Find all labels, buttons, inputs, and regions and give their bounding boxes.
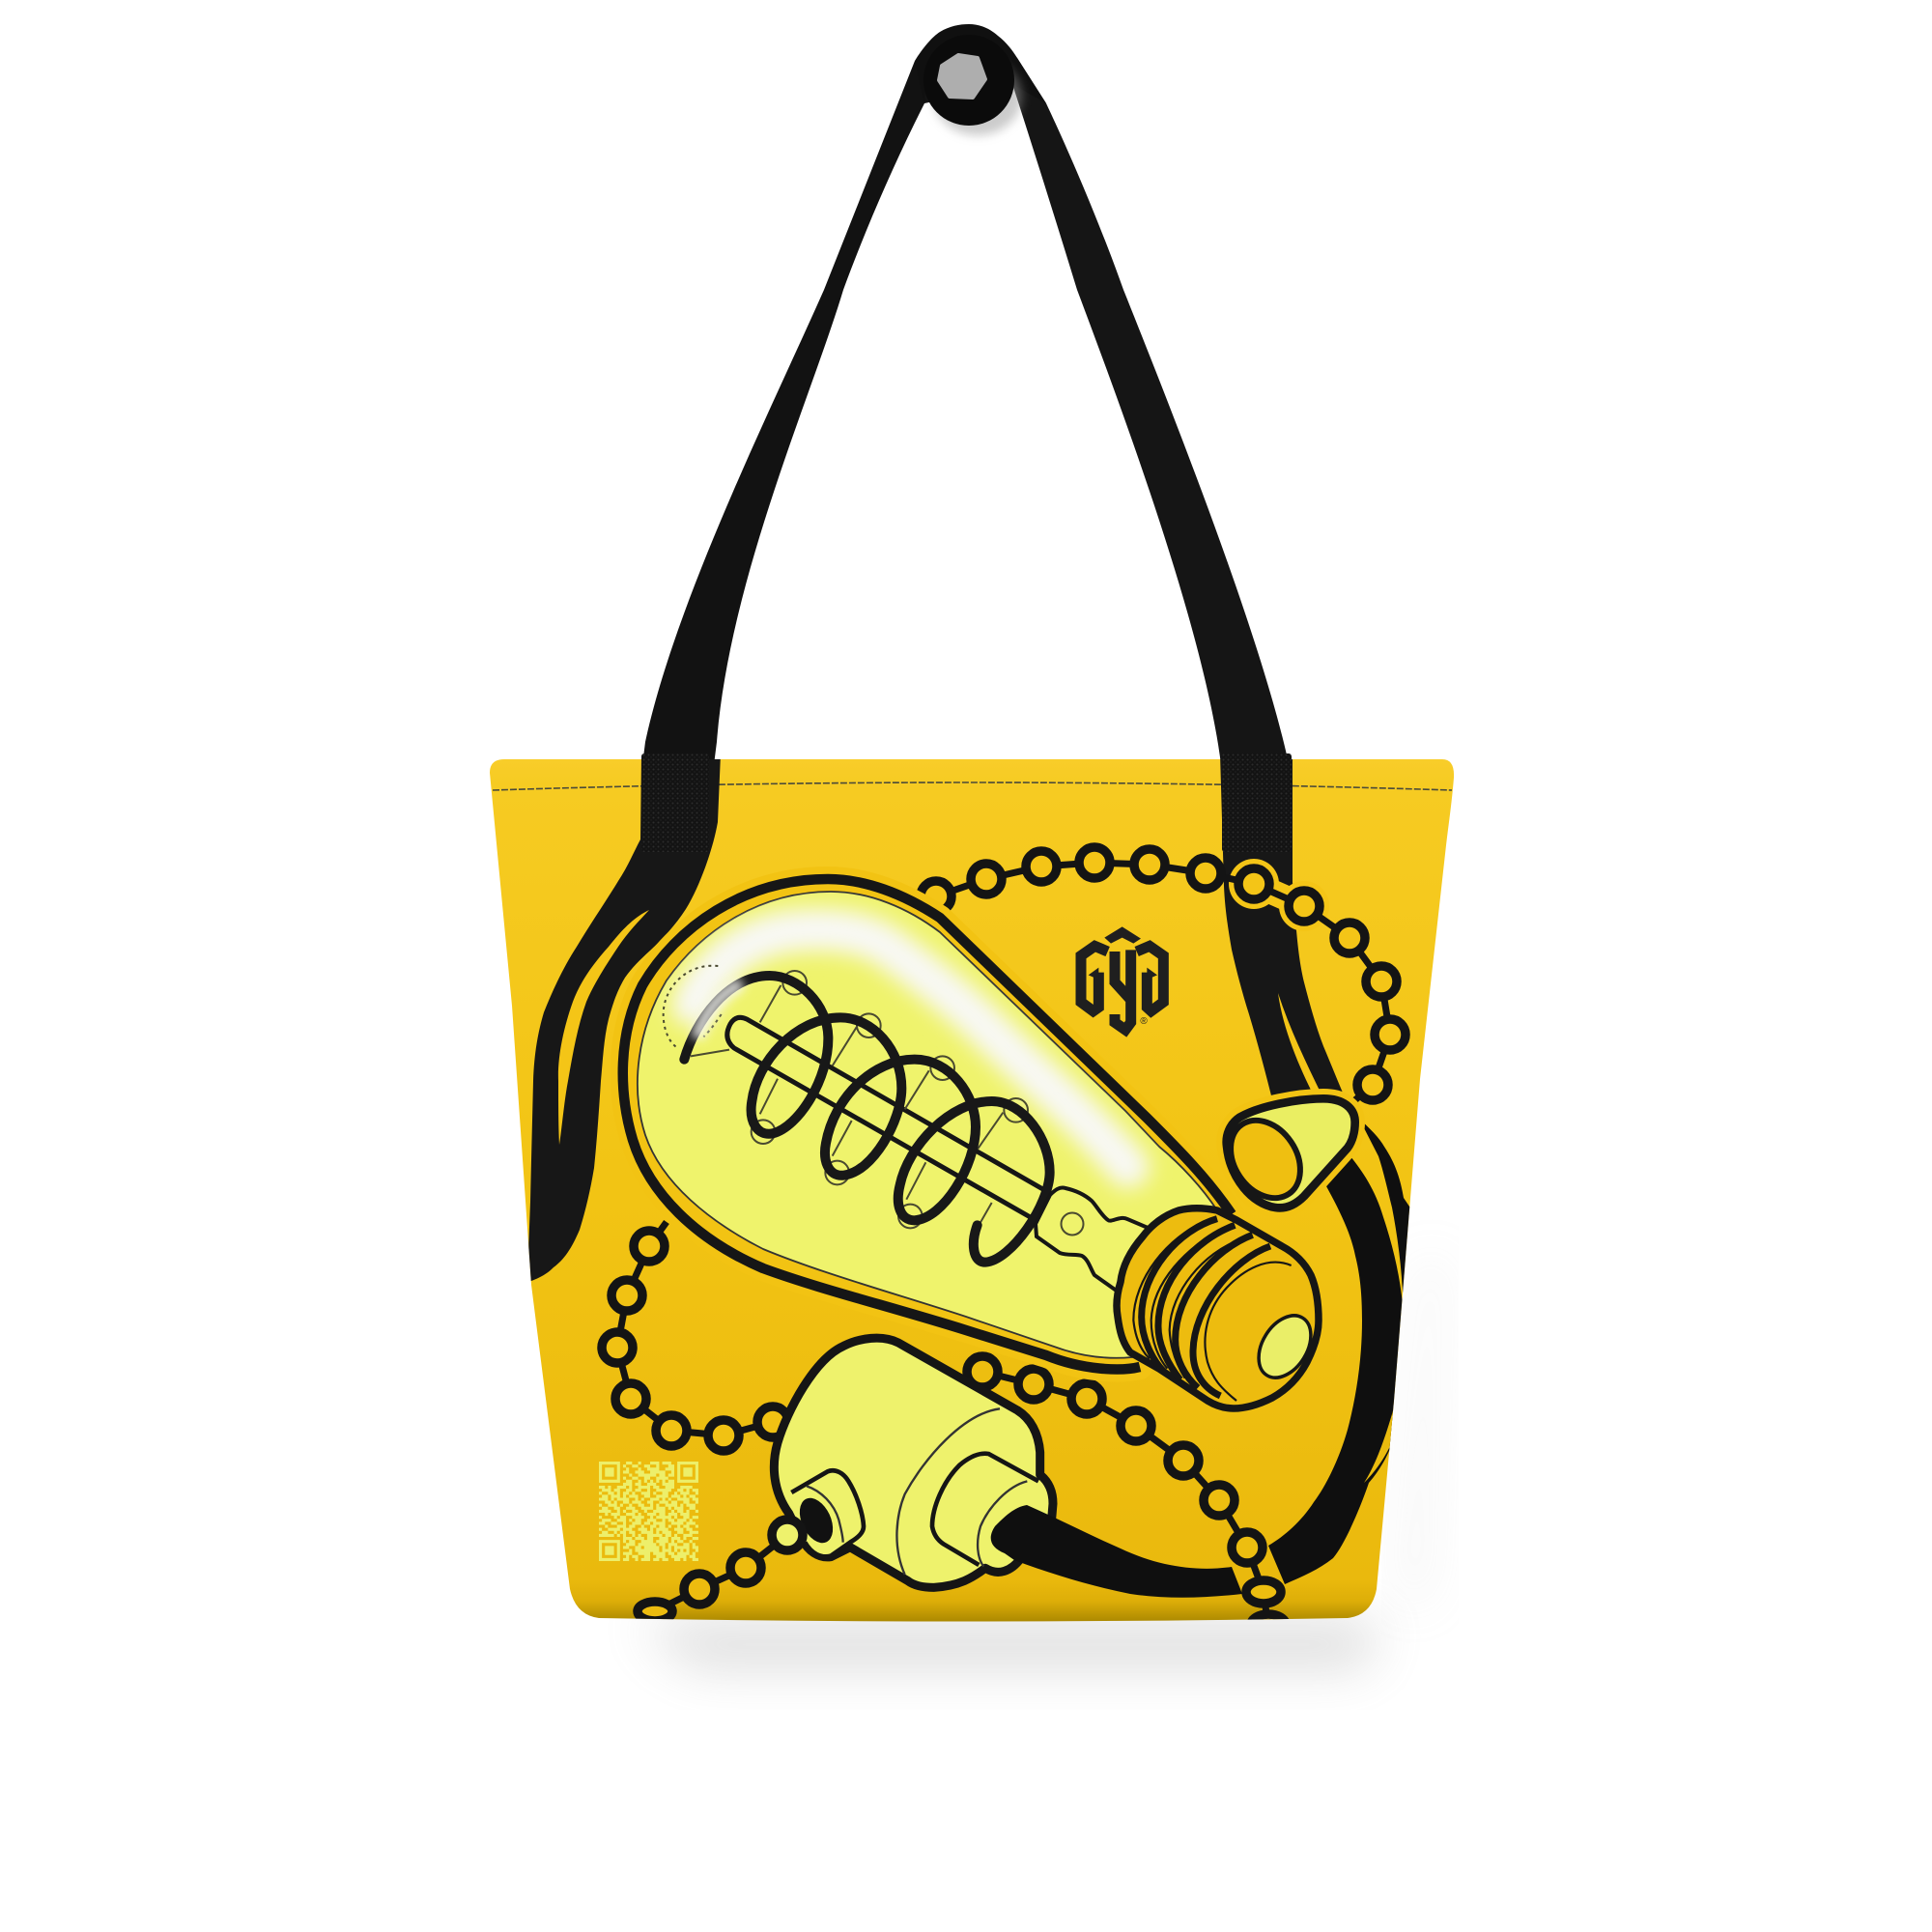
strap loop over peg (915, 24, 1046, 103)
top stitching (493, 782, 1452, 790)
bead chain lower left (602, 1222, 788, 1451)
filament support rod (727, 1017, 1053, 1219)
screw threads (1133, 1219, 1292, 1401)
socket seam (896, 1408, 1000, 1575)
bag drop shadow (638, 1256, 1444, 1666)
left shoulder strap (641, 58, 942, 773)
right cable slit (1278, 993, 1320, 1090)
outer cable strand (1364, 1124, 1410, 1293)
bulb white glow (693, 929, 1128, 1167)
left cable highlight slit (558, 910, 649, 1145)
bottom power cord (991, 1505, 1242, 1598)
wall peg (923, 35, 1022, 135)
socket left nub (791, 1470, 864, 1556)
bulb glass fill (638, 892, 1217, 1358)
QR code (599, 1463, 698, 1559)
lamp socket (774, 1338, 1053, 1587)
brand logo (1081, 926, 1163, 1030)
right strap patch (1222, 753, 1292, 852)
registered mark: ® (1140, 1016, 1148, 1027)
pull chain cone (1216, 1098, 1355, 1211)
filament wires and rings (664, 966, 1028, 1228)
bead chain lower right (967, 1356, 1286, 1635)
left printed cable (526, 753, 721, 1283)
filament highlight (697, 983, 742, 1038)
right shoulder strap (995, 39, 1291, 773)
screw base (1117, 1208, 1319, 1408)
bead chain upper right (921, 847, 1406, 1111)
lower cable slit (1364, 1409, 1393, 1483)
base contact (1257, 1314, 1313, 1379)
left strap patch (641, 753, 709, 852)
socket right collar (932, 1454, 1038, 1565)
printed artwork clipped to bag (526, 753, 1430, 1635)
light bulb (623, 879, 1321, 1408)
bead chain bottom left (638, 1520, 803, 1621)
right printed cable upper (1220, 753, 1346, 1103)
tote bag product illustration (490, 24, 1455, 1685)
right printed cable lower loop (1268, 1124, 1410, 1584)
bulb glass outline (618, 867, 1095, 1381)
bulb neck (1036, 1187, 1152, 1292)
bag body (490, 759, 1454, 1621)
socket hole (800, 1497, 833, 1544)
spiral filament (684, 976, 1050, 1263)
